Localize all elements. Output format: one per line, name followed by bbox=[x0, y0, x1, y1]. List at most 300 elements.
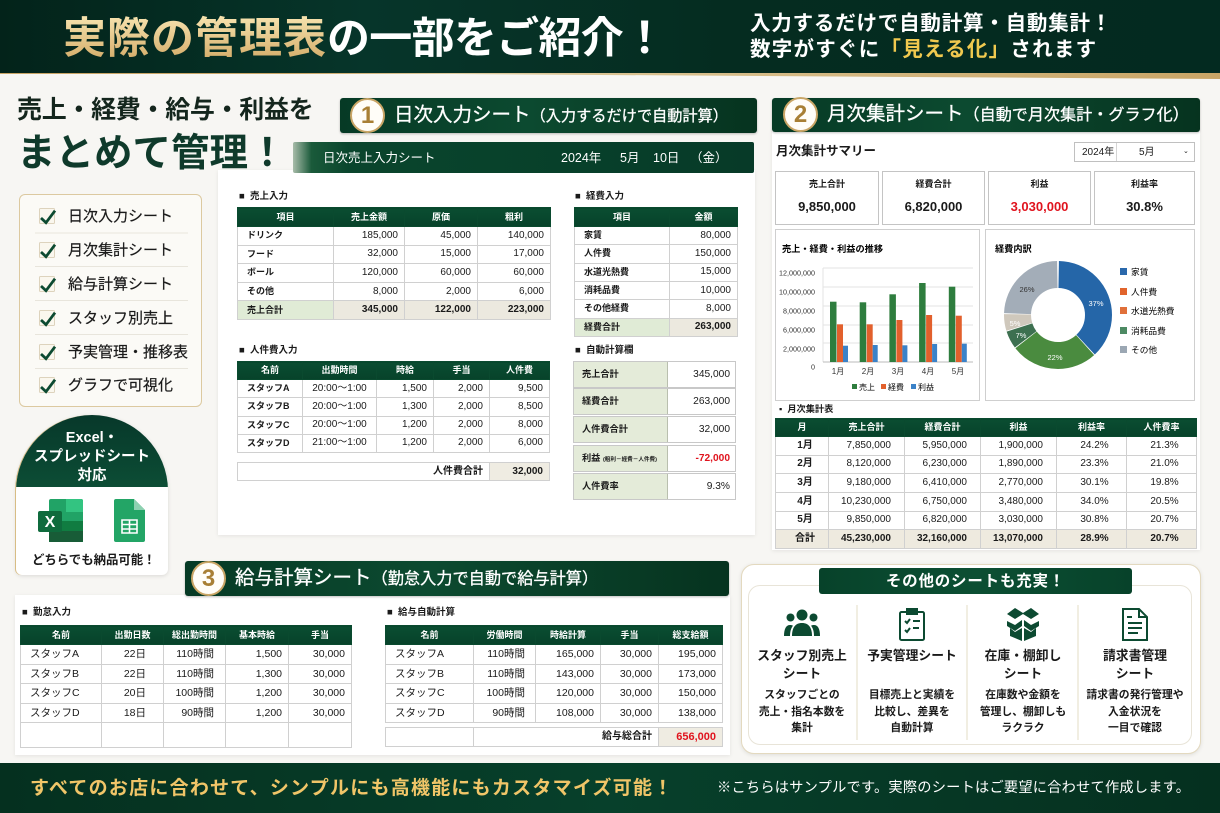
panel: Excel and spreadsheet badge bbox=[16, 415, 168, 575]
table: monthly summary: 23.3% bbox=[1080, 458, 1109, 469]
table: payroll auto calculation: 労働時間 bbox=[486, 630, 522, 640]
KPI: sales total bbox=[775, 171, 879, 225]
table: expenses input: 水道光熱費 bbox=[584, 267, 629, 277]
table: expenses input: 家賃 bbox=[584, 230, 602, 240]
bar chart: sales, expenses, profit trend: 10,000,000 bbox=[779, 288, 815, 296]
badge number 2: 2 bbox=[794, 101, 807, 128]
sheet title: シート bbox=[783, 666, 821, 681]
bar chart: sales, expenses, profit trend: 利益 bbox=[918, 382, 934, 392]
table: attendance input: 1,200 bbox=[256, 707, 282, 719]
bar chart: sales, expenses, profit trend: 売上・経費・利益の推移 bbox=[782, 243, 883, 254]
inner frame bbox=[748, 585, 1192, 745]
KPI: expenses total: 経費合計 bbox=[915, 179, 952, 189]
table: payroll auto calculation: 時給計算 bbox=[550, 630, 586, 640]
table: attendance input: スタッフA bbox=[30, 648, 79, 660]
table: labor cost input: 1,300 bbox=[402, 401, 427, 412]
sheet description: 管理し、棚卸しも bbox=[980, 706, 1066, 718]
table: labor cost input: 2,000 bbox=[458, 383, 483, 394]
section header 3 bbox=[185, 561, 729, 596]
table: attendance input bbox=[20, 625, 352, 748]
text: 日次入力シート bbox=[68, 208, 173, 225]
table: sales input: 120,000 bbox=[362, 267, 398, 278]
table: expenses input: 80,000 bbox=[700, 230, 731, 241]
sheet description: 比較し、差異を bbox=[874, 706, 950, 718]
table: sales input: 17,000 bbox=[513, 248, 544, 259]
table: attendance input: スタッフB bbox=[30, 668, 79, 680]
table: payroll auto calculation: スタッフA bbox=[395, 648, 444, 660]
table: sales input: 原価 bbox=[432, 212, 450, 222]
table: expenses input: 263,000 bbox=[695, 321, 731, 332]
table: attendance input: スタッフC bbox=[30, 687, 80, 699]
bar chart: sales, expenses, profit trend: 5月 bbox=[952, 367, 964, 376]
badge number 3 bbox=[191, 561, 226, 596]
label: auto calculation: ■ 自動計算欄 bbox=[575, 345, 634, 356]
table: payroll auto calculation: 195,000 bbox=[678, 648, 716, 660]
table: monthly summary: 1,890,000 bbox=[998, 458, 1043, 469]
table: labor cost input: 9,500 bbox=[518, 383, 543, 394]
table: sales input: 122,000 bbox=[435, 304, 471, 315]
text: グラフで可視化 bbox=[68, 377, 173, 394]
table: expenses input bbox=[574, 207, 738, 337]
sheet title: 予実管理シート bbox=[867, 648, 957, 663]
KPI: profit rate: 利益率 bbox=[1131, 179, 1158, 189]
table: labor cost input: 名前 bbox=[261, 365, 279, 375]
table: labor cost input: スタッフB bbox=[247, 401, 290, 411]
table: payroll auto calculation: 108,000 bbox=[556, 707, 594, 719]
table: attendance input: 総出勤時間 bbox=[172, 630, 217, 640]
bar chart: sales, expenses, profit trend: 8,000,000 bbox=[783, 306, 815, 316]
KPI: expenses total bbox=[882, 171, 985, 225]
table: monthly summary: 3月 bbox=[797, 477, 813, 488]
table: monthly summary: 6,820,000 bbox=[922, 514, 967, 525]
table: sales input: 345,000 bbox=[362, 304, 398, 315]
table: monthly summary: 30.1% bbox=[1080, 477, 1109, 488]
table: sales input: 140,000 bbox=[508, 230, 544, 241]
table: expenses input: 人件費 bbox=[584, 248, 611, 258]
table: labor cost input: スタッフD bbox=[247, 438, 290, 448]
label: payroll auto calculation: ■ 給与自動計算 bbox=[387, 607, 455, 618]
table: sales input: 売上合計 bbox=[247, 305, 283, 315]
donut chart: expense breakdown: その他 bbox=[1131, 344, 1157, 355]
table: monthly summary: 3,030,000 bbox=[998, 514, 1043, 525]
column: inventory bbox=[980, 608, 1066, 734]
bar chart: sales, expenses, profit trend: 売上 bbox=[859, 382, 875, 392]
table: expenses input: 10,000 bbox=[700, 285, 731, 296]
table: expenses input: 経費合計 bbox=[584, 322, 620, 332]
panel: 1 daily input sheet bbox=[218, 170, 755, 535]
panel: auto calculation rows: 9.3% bbox=[707, 481, 730, 492]
donut chart: expense breakdown: 7% bbox=[1016, 331, 1027, 340]
panel: auto calculation rows bbox=[573, 361, 736, 500]
table: sales input: 185,000 bbox=[362, 230, 398, 241]
table: attendance input: 100時間 bbox=[175, 687, 214, 699]
panel: auto calculation rows: 32,000 bbox=[699, 424, 730, 435]
table: payroll auto calculation: スタッフB bbox=[395, 668, 444, 680]
daily sheet title bar: （金） bbox=[690, 151, 728, 165]
sheet description: スタッフごとの bbox=[764, 689, 840, 701]
footer note: ※こちらはサンプルです。実際のシートはご要望に合わせて作成します。 bbox=[717, 780, 1190, 796]
bar chart: sales, expenses, profit trend: 0 bbox=[811, 362, 815, 372]
table: expenses input: 金額 bbox=[694, 212, 712, 222]
table: payroll total: 給与総合計 bbox=[602, 731, 652, 742]
table: monthly summary: 経費合計 bbox=[924, 422, 960, 432]
table: attendance input: 22日 bbox=[124, 668, 146, 680]
sheet description: 自動計算 bbox=[890, 722, 934, 734]
table: monthly summary: 2,770,000 bbox=[998, 477, 1043, 488]
bar chart: sales, expenses, profit trend bbox=[775, 229, 980, 401]
table: attendance input: 30,000 bbox=[313, 687, 345, 699]
other sheets heading: その他のシートも充実！ bbox=[886, 573, 1065, 590]
KPI: profit: 利益 bbox=[1030, 179, 1048, 189]
sheet description: 在庫数や金額を bbox=[985, 689, 1061, 701]
month selector: ⌄ bbox=[1183, 148, 1189, 155]
badge number 1 bbox=[350, 98, 385, 133]
table: labor cost input bbox=[237, 361, 550, 453]
icon: box bbox=[1007, 608, 1039, 641]
table: labor cost input: 出勤時間 bbox=[321, 365, 358, 375]
table: monthly summary: 9,180,000 bbox=[846, 477, 891, 488]
section header 1 bbox=[340, 98, 757, 133]
sheet description: 集計 bbox=[791, 722, 813, 734]
table: monthly summary: 人件費率 bbox=[1143, 422, 1180, 432]
badge number 3: 3 bbox=[202, 565, 215, 592]
table: sales input: 項目 bbox=[276, 212, 294, 222]
table: monthly summary: 6,230,000 bbox=[922, 458, 967, 469]
donut chart: expense breakdown: 5% bbox=[1010, 319, 1021, 328]
table: monthly summary: 20.7% bbox=[1150, 533, 1179, 544]
table: labor cost input: 1,200 bbox=[402, 419, 427, 430]
table: attendance input: 手当 bbox=[311, 630, 329, 640]
table: labor cost total bbox=[237, 462, 550, 481]
table: monthly summary: 34.0% bbox=[1080, 496, 1109, 507]
table: sales input: 6,000 bbox=[519, 286, 544, 297]
month selector: 5月 bbox=[1139, 147, 1155, 158]
table: payroll auto calculation: スタッフC bbox=[395, 687, 445, 699]
month selector bbox=[1074, 142, 1195, 162]
table: monthly summary: 2月 bbox=[797, 458, 813, 469]
table: monthly summary: 8,120,000 bbox=[846, 458, 891, 469]
panel: 3 payroll sheet bbox=[15, 595, 730, 755]
column: budget management bbox=[867, 608, 957, 734]
table: monthly summary: 5月 bbox=[797, 514, 813, 525]
panel: auto calculation rows: 人件費率 bbox=[582, 481, 619, 491]
label: monthly table: ▪ 月次集計表 bbox=[779, 404, 833, 414]
table: attendance input: 20日 bbox=[124, 687, 146, 699]
daily sheet title bar bbox=[293, 142, 754, 173]
panel: auto calculation rows: -72,000 bbox=[695, 453, 730, 464]
table: payroll total bbox=[385, 727, 723, 747]
KPI: expenses total: 6,820,000 bbox=[905, 199, 962, 214]
panel: auto calculation rows: 利益 (粗利－経費－人件費) bbox=[582, 453, 657, 463]
table: labor cost input: スタッフC bbox=[247, 420, 290, 430]
table: labor cost input: スタッフA bbox=[247, 383, 290, 393]
table: labor cost total: 32,000 bbox=[512, 466, 543, 476]
other sheets heading bbox=[819, 568, 1132, 594]
table: labor cost input: 20:00〜1:00 bbox=[312, 383, 367, 394]
table: monthly summary: 利益率 bbox=[1078, 422, 1105, 432]
table: labor cost input: 手当 bbox=[452, 365, 470, 375]
bar chart: sales, expenses, profit trend: 2月 bbox=[862, 367, 874, 376]
table: expenses input: 消耗品費 bbox=[584, 285, 620, 295]
table: monthly summary: 21.3% bbox=[1150, 440, 1179, 451]
monthly summary title: 月次集計サマリー bbox=[776, 144, 876, 158]
icon: Google Sheets bbox=[114, 499, 145, 542]
table: sales input: 60,000 bbox=[440, 267, 471, 278]
table: payroll auto calculation: 90時間 bbox=[492, 707, 525, 719]
header message bbox=[750, 12, 1112, 60]
table: sales input bbox=[237, 207, 551, 320]
table: monthly summary: 20.5% bbox=[1150, 496, 1179, 507]
sheet description: 一目で確認 bbox=[1108, 722, 1162, 734]
table: sales input: 15,000 bbox=[440, 248, 471, 259]
table: payroll auto calculation: 30,000 bbox=[620, 648, 652, 660]
table: payroll auto calculation bbox=[385, 625, 723, 723]
KPI: sales total: 9,850,000 bbox=[798, 199, 856, 214]
daily sheet title bar: 10日 bbox=[653, 151, 679, 165]
table: monthly summary: 21.0% bbox=[1150, 458, 1179, 469]
section 2 title: 月次集計シート（自動で月次集計・グラフ化） bbox=[827, 103, 1189, 125]
badge heading bbox=[16, 415, 168, 487]
donut chart: expense breakdown: 水道光熱費 bbox=[1131, 305, 1175, 316]
table: monthly summary: 24.2% bbox=[1080, 440, 1109, 451]
table: monthly summary: 9,850,000 bbox=[846, 514, 891, 525]
table: expenses input: 項目 bbox=[613, 212, 631, 222]
table: monthly summary: 13,070,000 bbox=[993, 533, 1043, 544]
section 1 title: 日次入力シート（入力するだけで自動計算） bbox=[394, 104, 728, 126]
table: attendance input: 90時間 bbox=[181, 707, 214, 719]
label: expenses input: ■ 経費入力 bbox=[575, 191, 624, 202]
table: expenses input: 15,000 bbox=[700, 266, 731, 277]
table: monthly summary bbox=[775, 418, 1197, 549]
table: sales input: ボール bbox=[247, 267, 274, 277]
table: payroll auto calculation: 30,000 bbox=[620, 668, 652, 680]
table: labor cost input: 1,500 bbox=[402, 383, 427, 394]
bar chart: sales, expenses, profit trend: 経費 bbox=[888, 382, 904, 392]
left heading bbox=[17, 96, 313, 175]
sheet title: 請求書管理 bbox=[1103, 648, 1167, 663]
bar chart: sales, expenses, profit trend: 4月 bbox=[922, 367, 934, 376]
icon: people bbox=[784, 610, 820, 636]
table: expenses input: その他経費 bbox=[584, 303, 629, 313]
table: expenses input: 8,000 bbox=[706, 303, 731, 314]
table: monthly summary: 5,950,000 bbox=[922, 440, 967, 451]
header message: 入力するだけで自動計算・自動集計！ bbox=[750, 12, 1112, 35]
table: payroll auto calculation: 総支給額 bbox=[672, 630, 708, 640]
bar chart: sales, expenses, profit trend: 1月 bbox=[832, 367, 844, 376]
table: sales input: 32,000 bbox=[367, 248, 398, 259]
heading line one: 売上・経費・給与・利益を bbox=[17, 96, 313, 124]
table: sales input: その他 bbox=[247, 286, 274, 296]
sheet title: スタッフ別売上 bbox=[757, 648, 847, 663]
text: 予実管理・推移表 bbox=[68, 344, 188, 361]
divider lines bbox=[856, 605, 1078, 740]
table: payroll auto calculation: 165,000 bbox=[556, 648, 594, 660]
badge heading: スプレッドシート bbox=[34, 449, 150, 465]
sheet description bbox=[869, 688, 955, 734]
table: monthly summary: 20.7% bbox=[1150, 514, 1179, 525]
sheet description: 入金状況を bbox=[1108, 706, 1162, 718]
header message: 数字がすぐに「見える化」されます bbox=[750, 38, 1097, 60]
table: attendance input: 30,000 bbox=[313, 707, 345, 719]
sheet description bbox=[980, 688, 1066, 734]
table: labor cost total: 人件費合計 bbox=[433, 466, 483, 476]
table: attendance input: スタッフD bbox=[30, 707, 80, 719]
section 3 title: 給与計算シート（勤怠入力で自動で給与計算） bbox=[235, 567, 598, 589]
table: labor cost input: 2,000 bbox=[458, 419, 483, 430]
daily sheet title bar: 5月 bbox=[620, 151, 639, 165]
table: payroll total: 656,000 bbox=[676, 730, 716, 742]
table: monthly summary: 10,230,000 bbox=[841, 496, 891, 507]
sheet description: 目標売上と実績を bbox=[869, 689, 955, 701]
table: payroll auto calculation: 110時間 bbox=[487, 668, 525, 680]
table: attendance input: 1,300 bbox=[256, 668, 282, 680]
heading line two: まとめて管理！ bbox=[17, 132, 287, 175]
table: sales input: ドリンク bbox=[247, 230, 283, 240]
main title: 実際の管理表の一部をご紹介！ bbox=[63, 15, 665, 63]
sheet description: 売上・指名本数を bbox=[759, 706, 845, 718]
table: labor cost input: 6,000 bbox=[518, 437, 543, 448]
KPI: sales total: 売上合計 bbox=[809, 179, 845, 189]
daily sheet title bar: 日次売上入力シート bbox=[323, 151, 436, 165]
badge heading: 対応 bbox=[78, 468, 106, 484]
sheet title bbox=[757, 648, 847, 681]
badge number 1: 1 bbox=[361, 102, 374, 129]
table: payroll auto calculation: 173,000 bbox=[678, 668, 716, 680]
text: 給与計算シート bbox=[68, 276, 173, 293]
table: payroll auto calculation: 100時間 bbox=[486, 687, 525, 699]
donut chart: expense breakdown: 22% bbox=[1047, 353, 1063, 362]
table: monthly summary: 28.9% bbox=[1080, 533, 1109, 544]
table: labor cost input: 21:00〜1:00 bbox=[312, 437, 367, 448]
footer banner bbox=[0, 763, 1220, 813]
text: スタッフ別売上 bbox=[68, 310, 173, 327]
sheet title bbox=[1103, 648, 1167, 681]
table: attendance input: 110時間 bbox=[176, 668, 214, 680]
section header 2 bbox=[772, 98, 1200, 132]
panel: auto calculation rows: 345,000 bbox=[693, 369, 730, 380]
bar chart: sales, expenses, profit trend: 3月 bbox=[892, 367, 904, 376]
table: sales input: 売上金額 bbox=[351, 212, 387, 222]
daily sheet title bar: 2024年 bbox=[561, 151, 601, 165]
table: labor cost input: 20:00〜1:00 bbox=[312, 419, 367, 430]
panel: auto calculation rows: 売上合計 bbox=[582, 369, 619, 379]
donut chart: expense breakdown: 家賃 bbox=[1131, 266, 1149, 277]
donut chart: expense breakdown bbox=[985, 229, 1195, 401]
panel: auto calculation rows: 263,000 bbox=[693, 396, 730, 407]
donut chart: expense breakdown: 26% bbox=[1019, 285, 1035, 294]
table: monthly summary: 売上合計 bbox=[848, 422, 884, 432]
table: sales input: フード bbox=[247, 249, 274, 259]
panel: auto calculation rows: 人件費合計 bbox=[582, 424, 628, 434]
table: attendance input: 1,200 bbox=[256, 687, 282, 699]
table: sales input: 223,000 bbox=[508, 304, 544, 315]
table: monthly summary: 30.8% bbox=[1080, 514, 1109, 525]
table: monthly summary: 月 bbox=[797, 422, 806, 432]
bar chart: sales, expenses, profit trend: 6,000,000 bbox=[783, 326, 815, 334]
table: payroll auto calculation: 30,000 bbox=[620, 707, 652, 719]
table: attendance input: 18日 bbox=[124, 707, 146, 719]
table: payroll auto calculation: 手当 bbox=[620, 630, 638, 640]
table: sales input: 粗利 bbox=[505, 212, 523, 222]
table: monthly summary: 利益 bbox=[1009, 422, 1028, 432]
table: labor cost input: 2,000 bbox=[458, 401, 483, 412]
table: expenses input: 150,000 bbox=[695, 248, 731, 259]
badge number 2 bbox=[783, 97, 818, 132]
table: attendance input: 出勤日数 bbox=[114, 630, 150, 640]
table: monthly summary: 1月 bbox=[797, 440, 813, 451]
donut chart: expense breakdown: 人件費 bbox=[1131, 286, 1157, 297]
panel: feature checklist bbox=[19, 194, 202, 407]
icon: clipboard bbox=[899, 608, 925, 641]
KPI: profit rate bbox=[1094, 171, 1195, 225]
table: monthly summary: 45,230,000 bbox=[841, 533, 891, 544]
table: attendance input: 名前 bbox=[52, 630, 70, 640]
table: payroll auto calculation: 名前 bbox=[420, 630, 438, 640]
sheet description: ラクラク bbox=[1001, 722, 1045, 734]
table: monthly summary: 4月 bbox=[797, 496, 813, 507]
table: monthly summary: 19.8% bbox=[1150, 477, 1179, 488]
sheet description bbox=[1086, 688, 1184, 734]
table: labor cost input: 1,200 bbox=[402, 437, 427, 448]
donut chart: expense breakdown: 経費内訳 bbox=[995, 243, 1033, 254]
column: staff sales bbox=[757, 610, 847, 734]
text: 月次集計シート bbox=[68, 242, 173, 259]
KPI: profit bbox=[988, 171, 1091, 225]
label: attendance input: ■ 勤怠入力 bbox=[22, 607, 71, 618]
sheet title: シート bbox=[1004, 666, 1042, 681]
table: monthly summary: 6,750,000 bbox=[922, 496, 967, 507]
table: labor cost input: 時給 bbox=[396, 365, 414, 375]
table: labor cost input: 2,000 bbox=[458, 437, 483, 448]
sheet title: 在庫・棚卸し bbox=[985, 648, 1061, 663]
table: payroll auto calculation: 150,000 bbox=[678, 687, 716, 699]
table: monthly summary: 6,410,000 bbox=[922, 477, 967, 488]
badge caption: どちらでも納品可能！ bbox=[32, 553, 156, 567]
table: sales input: 2,000 bbox=[446, 286, 471, 297]
table: payroll auto calculation: 110時間 bbox=[487, 648, 525, 660]
table: payroll auto calculation: 138,000 bbox=[678, 707, 716, 719]
table: labor cost input: 20:00〜1:00 bbox=[312, 401, 367, 412]
checklist items bbox=[35, 208, 188, 394]
table: labor cost input: 8,000 bbox=[518, 419, 543, 430]
month selector: 2024年 bbox=[1082, 147, 1114, 158]
footer message: すべてのお店に合わせて、シンプルにも高機能にもカスタマイズ可能！ bbox=[30, 778, 674, 799]
table: attendance input: 基本時給 bbox=[239, 630, 275, 640]
panel: 2 monthly summary bbox=[772, 130, 1200, 550]
label: sales input: ■ 売上入力 bbox=[239, 191, 288, 202]
table: attendance input: 30,000 bbox=[313, 648, 345, 660]
header banner bbox=[0, 0, 1220, 74]
table: attendance input: 110時間 bbox=[176, 648, 214, 660]
table: attendance input: 30,000 bbox=[313, 668, 345, 680]
KPI: profit rate: 30.8% bbox=[1126, 199, 1163, 214]
table: labor cost input: 人件費 bbox=[506, 365, 533, 375]
sheet description bbox=[759, 688, 845, 734]
table: payroll auto calculation: 143,000 bbox=[556, 668, 594, 680]
donut chart: expense breakdown: 37% bbox=[1088, 299, 1104, 308]
sheet description: 請求書の発行管理や bbox=[1086, 689, 1184, 701]
table: attendance input: 22日 bbox=[124, 648, 146, 660]
table: monthly summary: 3,480,000 bbox=[998, 496, 1043, 507]
icon: Excel bbox=[38, 499, 83, 542]
sheet title: シート bbox=[1116, 666, 1154, 681]
column: invoices bbox=[1086, 608, 1184, 734]
table: monthly summary: 32,160,000 bbox=[917, 533, 967, 544]
bar chart: sales, expenses, profit trend: 12,000,000 bbox=[779, 268, 815, 278]
sheet title bbox=[985, 648, 1061, 681]
table: payroll auto calculation: 30,000 bbox=[620, 687, 652, 699]
table: sales input: 45,000 bbox=[440, 230, 471, 241]
